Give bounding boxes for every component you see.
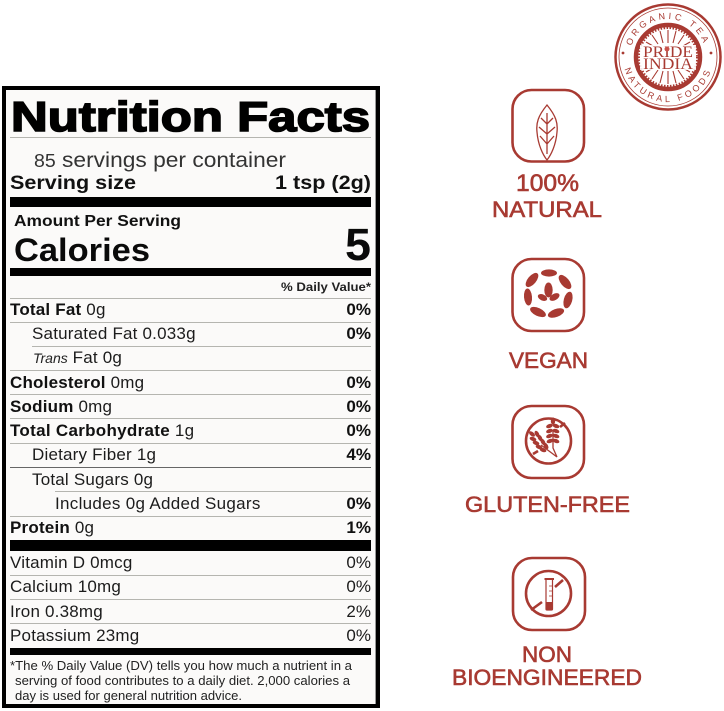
nutrient rows: 0% xyxy=(346,421,371,440)
vitamins and minerals: Calcium 10mg xyxy=(10,577,121,596)
icon: crossed-out test tube xyxy=(513,558,585,630)
calories block: 5 xyxy=(345,219,371,270)
vitamins and minerals: 0% xyxy=(346,553,371,572)
vitamins and minerals: 0% xyxy=(346,626,371,645)
nutrient rows: 4% xyxy=(346,445,371,464)
serving size: 1 tsp (2g) xyxy=(275,172,371,194)
nutrient rows: Includes 0g Added Sugars xyxy=(55,494,261,513)
icon: leaf xyxy=(512,90,584,162)
calories block: Amount Per Serving xyxy=(14,213,181,230)
badge: non bioengineered: NON xyxy=(522,642,572,667)
logo: Pride of India: PRIDE xyxy=(643,44,693,61)
nutrient rows: 0% xyxy=(346,494,371,513)
nutrient rows: Total Sugars 0g xyxy=(32,470,153,489)
calories block: Calories xyxy=(14,232,150,268)
nutrient rows: Total Carbohydrate 1g xyxy=(10,421,194,440)
vitamins and minerals xyxy=(10,553,371,645)
nutrient rows: Total Fat 0g xyxy=(10,300,106,319)
nutrient rows: 0% xyxy=(346,373,371,392)
footnote xyxy=(10,658,353,703)
nutrient rows xyxy=(10,300,371,537)
vitamins and minerals: Potassium 23mg xyxy=(10,626,139,645)
servings per container: 85 servings per container xyxy=(34,149,286,172)
nutrient rows: Dietary Fiber 1g xyxy=(32,445,156,464)
panel: nutrition facts label xyxy=(4,88,378,706)
nutrient rows: 0% xyxy=(346,300,371,319)
icon: crossed-out wheat xyxy=(512,406,584,478)
calories block xyxy=(14,213,371,270)
serving size xyxy=(10,172,371,194)
logo: Pride of India xyxy=(614,3,722,111)
logo: Pride of India: ORGANIC TEA xyxy=(626,12,708,45)
footnote: *The % Daily Value (DV) tells you how much a nutrient in a xyxy=(10,658,353,673)
badge: gluten-free xyxy=(465,406,630,517)
title: Nutrition Facts xyxy=(11,93,370,140)
badge: non bioengineered xyxy=(452,558,642,690)
nutrient rows: Trans Fat 0g xyxy=(33,348,122,367)
nutrient rows: Sodium 0mg xyxy=(10,397,112,416)
logo: Pride of India: NATURAL FOODS xyxy=(624,67,710,102)
icon: seeds xyxy=(512,259,584,331)
nutrient rows: Cholesterol 0mg xyxy=(10,373,144,392)
nutrient rows: 0% xyxy=(346,324,371,343)
badge: 100% natural: NATURAL xyxy=(492,197,602,222)
logo: Pride of India: INDIA xyxy=(643,56,693,73)
serving size: Serving size xyxy=(10,172,136,194)
badge: non bioengineered: BIOENGINEERED xyxy=(452,665,642,690)
badge: 100% natural: 100% xyxy=(516,170,579,197)
vitamins and minerals: Iron 0.38mg xyxy=(10,602,103,621)
badge: vegan: VEGAN xyxy=(509,348,588,373)
vitamins and minerals: Vitamin D 0mcg xyxy=(10,553,132,572)
footnote: day is used for general nutrition advice. xyxy=(15,688,242,703)
badge: 100% natural xyxy=(492,90,602,222)
nutrient rows: 1% xyxy=(346,518,371,537)
vitamins and minerals: 0% xyxy=(346,577,371,596)
daily value header: % Daily Value* xyxy=(281,280,371,294)
nutrient rows: Protein 0g xyxy=(10,518,94,537)
badge: gluten-free: GLUTEN-FREE xyxy=(465,492,630,517)
nutrient rows: 0% xyxy=(346,397,371,416)
nutrient rows: Saturated Fat 0.033g xyxy=(32,324,196,343)
footnote: serving of food contributes to a daily diet. 2,000 calories a xyxy=(15,673,351,688)
vitamins and minerals: 2% xyxy=(346,602,371,621)
badge: vegan xyxy=(509,259,588,373)
